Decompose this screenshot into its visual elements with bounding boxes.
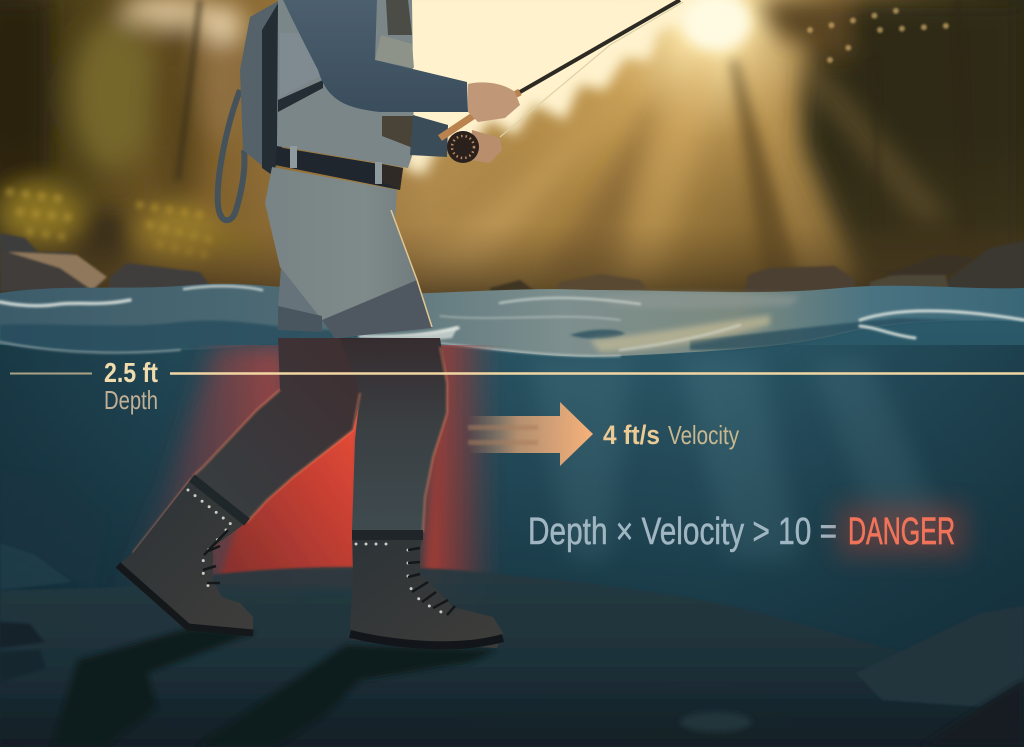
right tree specks: [810, 10, 960, 60]
rear forearm: [410, 115, 448, 157]
glints: [590, 315, 770, 352]
left foliage: [0, 0, 263, 270]
dark ripples: [0, 318, 1024, 352]
sun rays: [420, 20, 950, 285]
riverbed: [0, 567, 1024, 747]
wader edge highlight: [391, 210, 432, 327]
depth label: [104, 357, 158, 415]
danger glow: [838, 505, 966, 557]
belt: [275, 147, 403, 190]
left leg underwater: [192, 338, 362, 522]
leaf speckles: [10, 192, 210, 255]
bank shade: [0, 130, 1024, 300]
danger formula: DANGER: [848, 511, 955, 553]
wader upper: [265, 167, 432, 338]
front hand: [468, 82, 520, 122]
dark shaft: [730, 60, 800, 280]
rear thigh: [278, 268, 322, 328]
trunks: [178, 0, 968, 250]
velocity label: 4 ft/s: [603, 420, 660, 450]
boot shadows: [52, 628, 497, 747]
danger formula: Depth × Velocity > 10 =: [528, 511, 837, 553]
cuff foam: [345, 326, 458, 343]
depth label: 2.5 ft: [104, 357, 158, 388]
depth line: [10, 372, 1024, 374]
submerged side rocks: [0, 470, 105, 590]
velocity arrow: [468, 402, 593, 466]
riverbank rocks: [0, 233, 1024, 296]
right boot: [350, 530, 503, 648]
front arm: [283, 0, 468, 112]
underwater light shafts: [530, 360, 950, 560]
river surface: [0, 284, 1024, 357]
right glow: [420, 345, 496, 590]
fly line: [500, 2, 683, 137]
fly rod: [520, 0, 680, 92]
forest background: [0, 0, 1024, 300]
vest panel: [280, 33, 320, 97]
left glow: [137, 345, 280, 576]
velocity label: Velocity: [668, 420, 739, 450]
foam highlights: [0, 286, 1024, 356]
rear shoulder strap: [386, 0, 412, 35]
right forest: [760, 0, 1024, 285]
velocity label: [603, 420, 739, 450]
backpack: [218, 0, 282, 220]
chest strap: [278, 80, 323, 112]
red danger glow: [137, 345, 496, 590]
wader cuff: [322, 280, 432, 338]
depth label: Depth: [104, 385, 158, 415]
sun: [682, 0, 750, 50]
right leg underwater: [340, 338, 447, 532]
reel: [447, 131, 479, 163]
rear hand: [470, 130, 502, 163]
between legs: [218, 406, 359, 588]
vest brown panel: [382, 116, 413, 148]
left boot: [118, 478, 253, 633]
vest pocket: [375, 35, 414, 68]
underwater area: [0, 300, 1024, 747]
torso base: [277, 0, 414, 168]
rear wader cuff: [278, 306, 322, 332]
rod handle: [440, 92, 520, 138]
sky opening: [395, 0, 700, 175]
angler figure: [118, 0, 683, 648]
leg rim light: [133, 347, 447, 553]
